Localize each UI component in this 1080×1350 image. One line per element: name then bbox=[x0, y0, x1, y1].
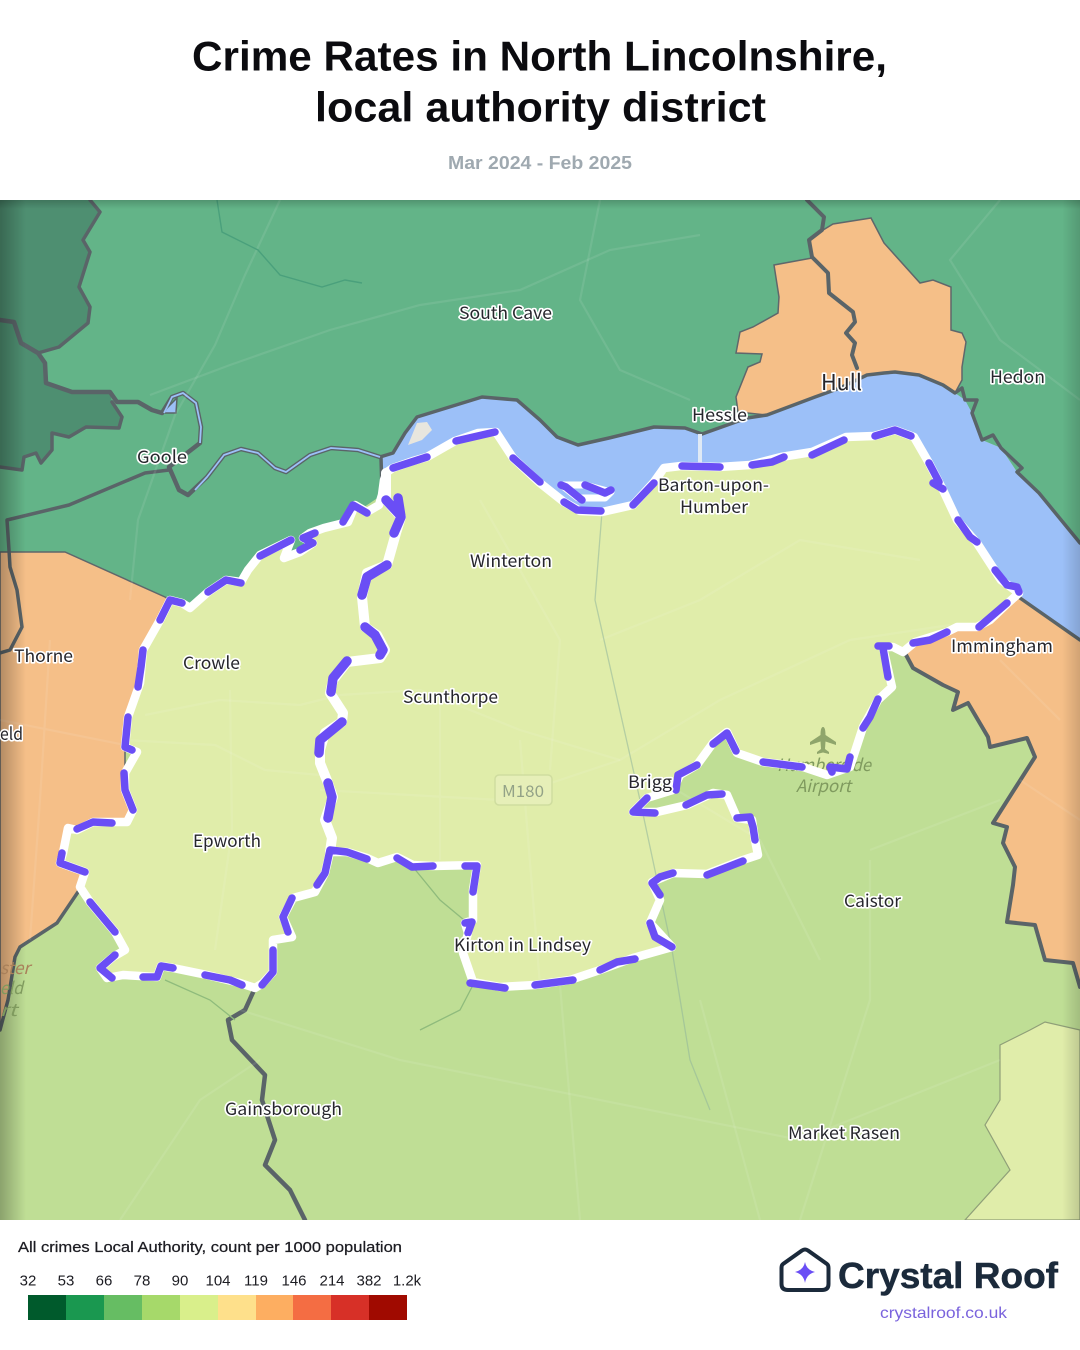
title bbox=[192, 32, 887, 130]
place labels: Scunthorpe bbox=[403, 683, 498, 708]
place labels: Caistor bbox=[844, 887, 901, 912]
place labels: Crowle bbox=[183, 649, 240, 674]
region: pale district south-east bbox=[965, 1022, 1080, 1220]
cut-off airport label at left edge: ster bbox=[0, 954, 32, 979]
place labels: Winterton bbox=[470, 547, 552, 572]
title: Crime Rates in North Lincolnshire, bbox=[192, 32, 887, 80]
place labels: eld bbox=[0, 720, 23, 745]
place labels: Kirton in Lindsey bbox=[454, 931, 591, 956]
region: orange Hull bbox=[736, 218, 966, 415]
legend values: 104 bbox=[205, 1272, 231, 1290]
logo: Crystal Roof bbox=[782, 1250, 1059, 1322]
legend bbox=[18, 1239, 422, 1320]
airport label: Humberside bbox=[777, 751, 873, 776]
legend values: 119 bbox=[244, 1272, 268, 1290]
faint roads and streams bbox=[0, 200, 1080, 1220]
cut-off airport label at left edge: rt bbox=[0, 996, 20, 1021]
legend values: 78 bbox=[134, 1272, 150, 1290]
icon: house with star bbox=[782, 1250, 828, 1290]
place labels: Immingham bbox=[951, 632, 1053, 657]
choropleth map bbox=[0, 200, 1080, 1220]
legend values: 146 bbox=[281, 1272, 307, 1290]
estuary island bbox=[408, 422, 432, 445]
legend values: 32 bbox=[20, 1272, 36, 1290]
place labels: Thorne bbox=[14, 642, 73, 667]
place labels: Hessle bbox=[692, 401, 747, 426]
legend values: 90 bbox=[172, 1272, 188, 1290]
legend values: 66 bbox=[96, 1272, 112, 1290]
North Lincolnshire purple dashed boundary bbox=[60, 430, 1019, 988]
legend values: 1.2k bbox=[393, 1272, 422, 1290]
legend values bbox=[20, 1272, 422, 1290]
cut-off airport label at left edge: eld bbox=[0, 974, 25, 999]
legend values: 382 bbox=[356, 1272, 382, 1290]
place labels: Brigg bbox=[628, 768, 672, 793]
place labels: Barton-upon- bbox=[658, 471, 769, 496]
district boundary lines bbox=[0, 200, 1080, 1220]
M180 road shield bbox=[495, 775, 552, 805]
logo wordmark: Crystal Roof bbox=[838, 1255, 1059, 1296]
place labels: Goole bbox=[137, 443, 187, 468]
place labels: Hull bbox=[821, 365, 862, 397]
airport label bbox=[778, 758, 872, 796]
legend values: 53 bbox=[58, 1272, 74, 1290]
M180 road shield: M180 bbox=[502, 778, 544, 802]
legend colour scale bbox=[28, 1295, 407, 1320]
region: orange west district bbox=[0, 552, 170, 1030]
place labels: Gainsborough bbox=[225, 1095, 342, 1120]
North Lincolnshire white boundary bbox=[60, 430, 1019, 988]
place labels: Humber bbox=[680, 493, 748, 518]
place labels: South Cave bbox=[459, 299, 552, 324]
river Ouse water bbox=[163, 392, 380, 490]
logo url: crystalroof.co.uk bbox=[880, 1305, 1008, 1322]
airport label: Airport bbox=[796, 772, 854, 797]
title: local authority district bbox=[315, 84, 766, 130]
place labels: Market Rasen bbox=[788, 1119, 900, 1144]
region: darker green north-west district bbox=[0, 200, 122, 470]
icon: airport plane bbox=[810, 727, 836, 754]
Humber estuary bbox=[380, 372, 1080, 640]
legend values: 214 bbox=[319, 1272, 345, 1290]
subtitle: date range: Mar 2024 - Feb 2025 bbox=[448, 153, 632, 173]
place labels: Hedon bbox=[990, 363, 1045, 388]
region: East Riding, green bbox=[0, 200, 1080, 608]
Humber Bridge bbox=[698, 434, 702, 464]
region: North Lincolnshire fill bbox=[60, 430, 1019, 988]
cut-off airport label at left edge bbox=[1, 962, 32, 1016]
legend title: All crimes Local Authority, count per 1000 population bbox=[18, 1239, 402, 1256]
river inlet near Goole bbox=[162, 398, 177, 413]
region: orange North East Lincolnshire bbox=[905, 593, 1080, 987]
place labels: Epworth bbox=[193, 827, 261, 852]
edge shading bbox=[0, 200, 1080, 1220]
place labels bbox=[0, 299, 1053, 1144]
